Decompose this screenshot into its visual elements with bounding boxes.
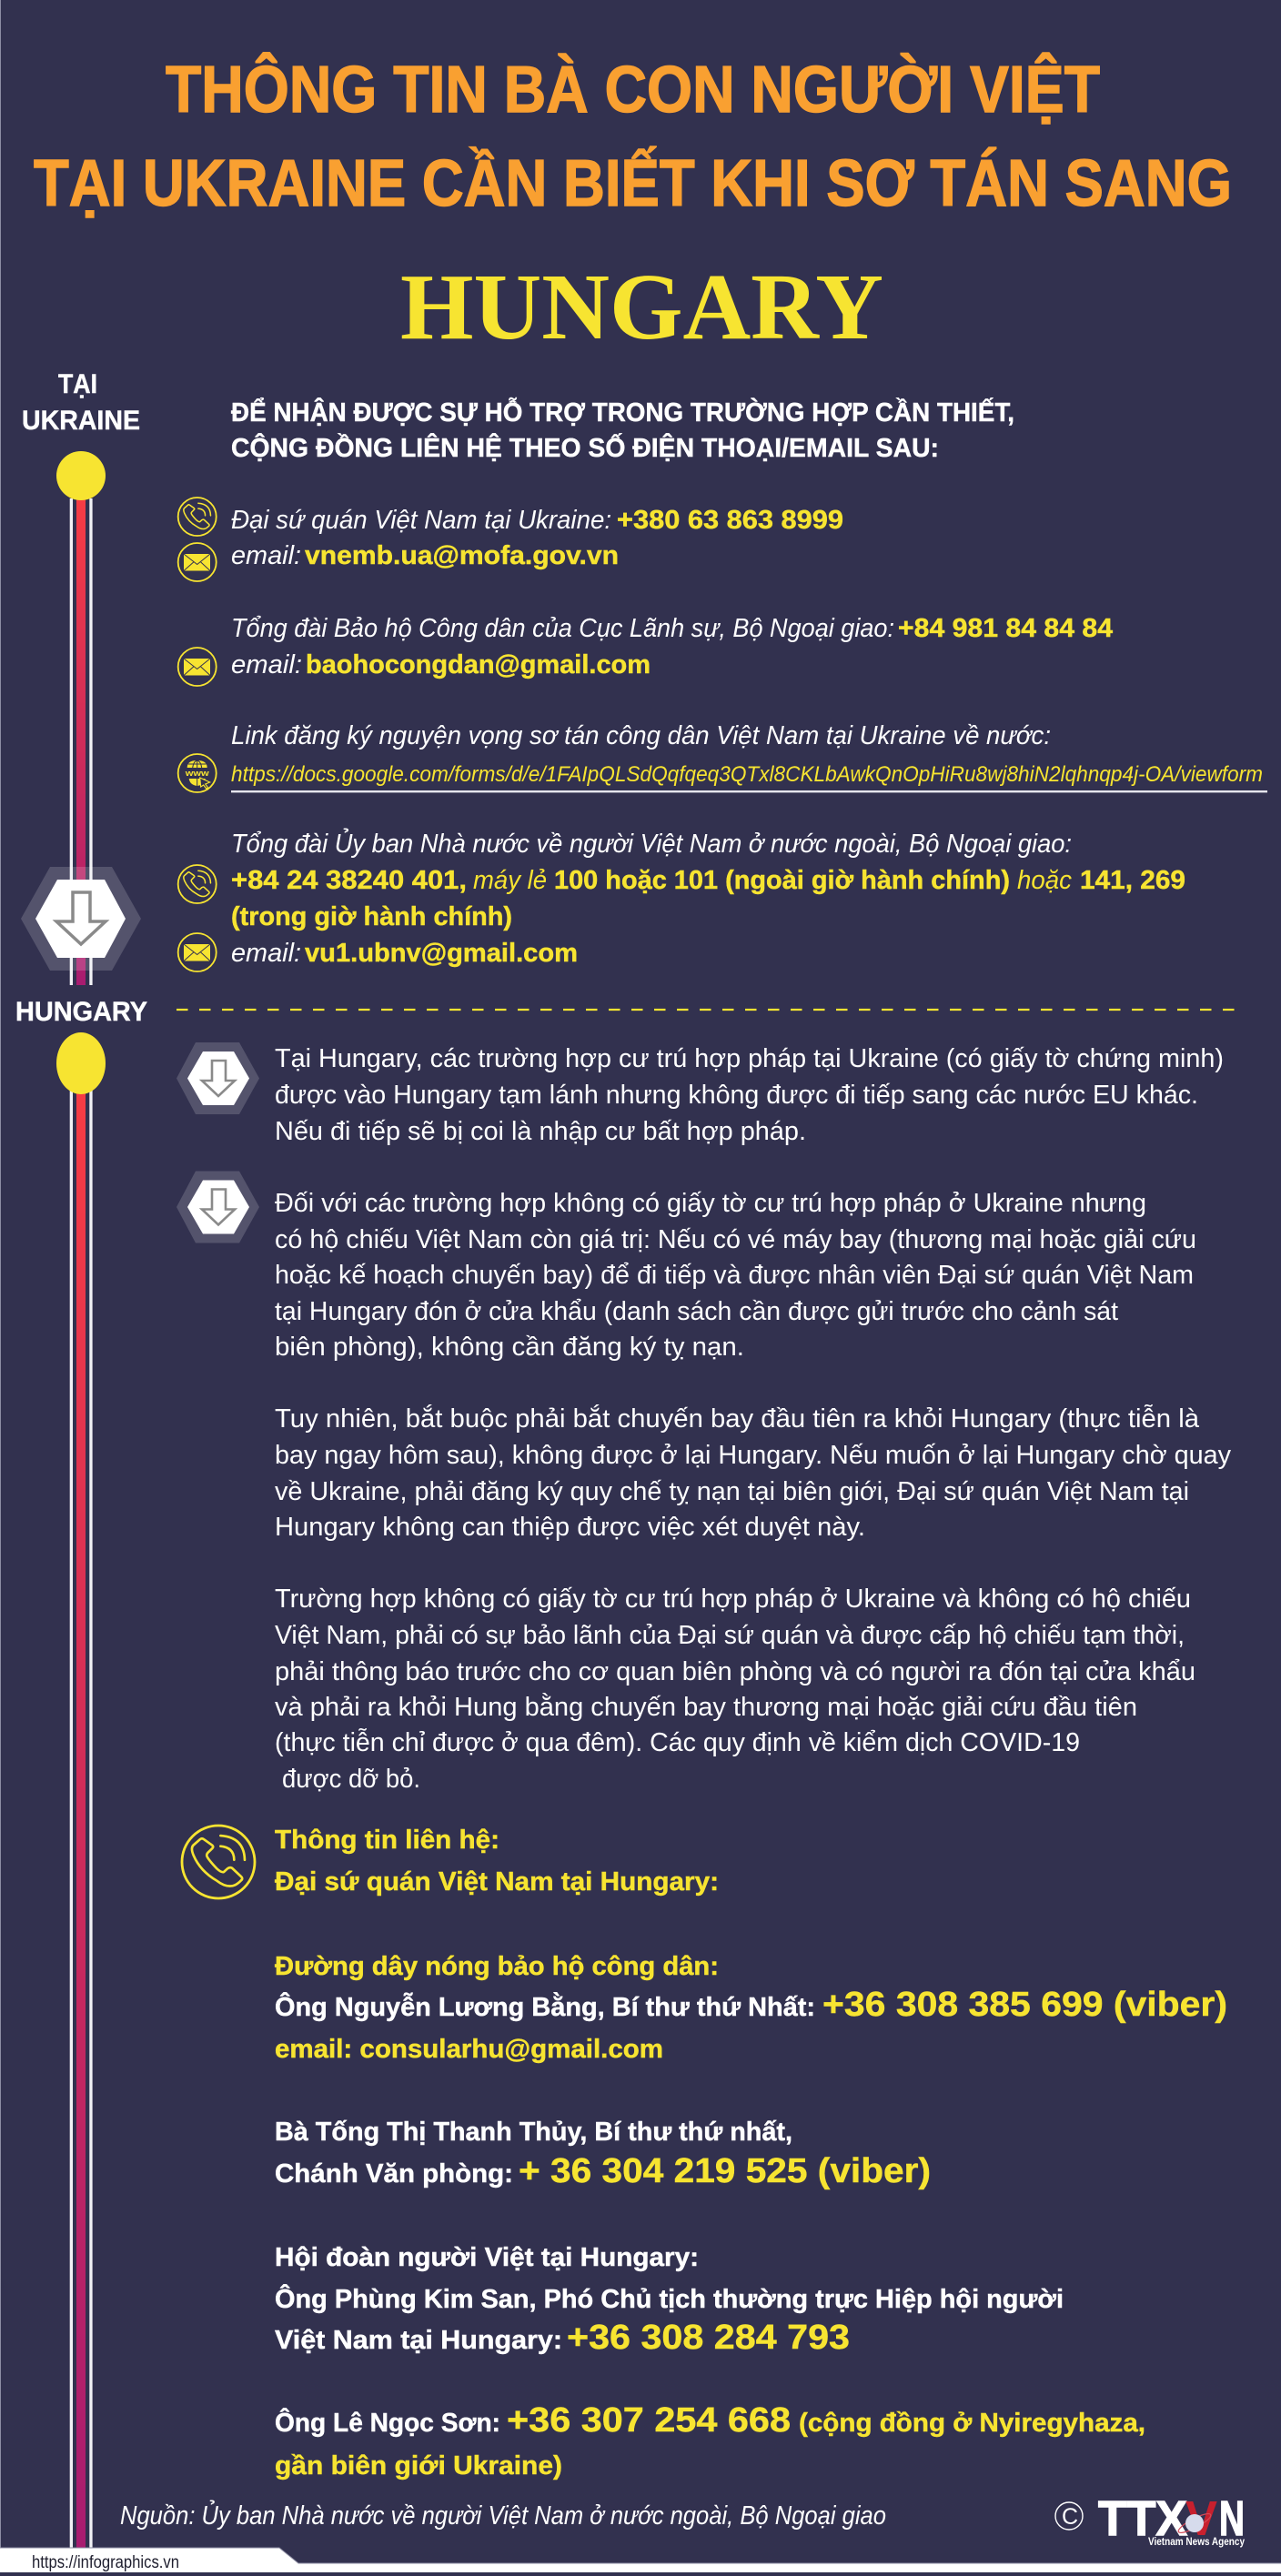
committee phone: 141, 269 (1080, 866, 1185, 895)
contact heading: Hungary embassy: Đại sứ quán Việt Nam tại Hungary: (275, 1867, 719, 1897)
text block: legal residents: Tại Hungary, các trường hợp cư trú hợp pháp tại Ukraine (có giấy tờ chứng minh) (275, 1044, 1224, 1073)
icon: mail (178, 543, 217, 581)
text block: first flight out: Tuy nhiên, bắt buộc phải bắt chuyến bay đầu tiên ra khỏi Hungary (thực tiễn là (275, 1404, 1200, 1434)
footer url: https://infographics.vn (32, 2553, 179, 2572)
text block: no residence papers, valid passport: Đối với các trường hợp không có giấy tờ cư trú hợp pháp ở Ukraine nhưng (275, 1189, 1146, 1218)
embassy phone (231, 506, 843, 535)
embassy phone: Đại sứ quán Việt Nam tại Ukraine: (231, 506, 611, 535)
text block: no papers and no passport: được dỡ bỏ. (282, 1765, 420, 1794)
text block: first flight out: Hungary không can thiệp được việc xét duyệt này. (275, 1513, 865, 1542)
contact: Nyiregyhaza community: Ông Lê Ngọc Sơn: (275, 2407, 500, 2438)
contact: Nyiregyhaza community: (cộng đồng ở Nyiregyhaza, (799, 2409, 1145, 2438)
committee phone (231, 866, 1185, 931)
text block: first flight out: về Ukraine, phải đăng ký quy chế tỵ nạn tại biên giới, Đại sứ quán Việt Nam tại (275, 1477, 1189, 1506)
contact: citizen protection hotline: email: consularhu@gmail.com (275, 2035, 663, 2064)
icon: large phone (182, 1826, 255, 1898)
text block: first flight out: bay ngay hôm sau), không được ở lại Hungary. Nếu muốn ở lại Hungary chờ quay (275, 1441, 1231, 1470)
committee email: vu1.ubnv@gmail.com (305, 939, 578, 968)
title (34, 53, 1232, 220)
consular email: baohocongdan@gmail.com (306, 650, 651, 679)
text block: legal residents: Nếu đi tiếp sẽ bị coi là nhập cư bất hợp pháp. (275, 1117, 806, 1146)
committee email: email: (231, 939, 301, 968)
contact heading: Hungary embassy: Thông tin liên hệ: (275, 1826, 499, 1855)
icon: hexagon down arrow (21, 867, 141, 971)
icon: phone (178, 865, 217, 903)
text block: no residence papers, valid passport (275, 1189, 1196, 1362)
contact: registration link (178, 721, 1267, 792)
logo: TTXVN: N (1219, 2491, 1245, 2546)
logo: TTXVN: C (1062, 2504, 1078, 2530)
text block: no residence papers, valid passport: tại Hungary đón ở cửa khẩu (danh sách cần được gửi trước cho cảnh sát (275, 1297, 1118, 1326)
text block: no papers and no passport: Trường hợp không có giấy tờ cư trú hợp pháp ở Ukraine và không có hộ chiếu (275, 1585, 1191, 1614)
committee name: Tổng đài Ủy ban Nhà nước về người Việt Nam ở nước ngoài, Bộ Ngoại giao: (231, 827, 1072, 859)
consular email: email: (231, 650, 302, 679)
contact: overseas Vietnamese committee (178, 827, 1185, 971)
contact: Vietnamese association: Hội đoàn người Việt tại Hungary: (275, 2243, 699, 2272)
contact heading: Hungary embassy (275, 1826, 719, 1897)
footer band (0, 2548, 1281, 2572)
contact: Vietnamese association: +36 308 284 793 (567, 2319, 850, 2357)
text block: no papers and no passport: (thực tiễn chỉ được ở qua đêm). Các quy định về kiểm dịch COVID-19 (275, 1727, 1080, 1757)
logo: TTXVN: Vietnam News Agency (1148, 2535, 1245, 2548)
embassy phone: +380 63 863 8999 (617, 506, 843, 535)
text block: no papers and no passport: Việt Nam, phải có sự bảo lãnh của Đại sứ quán và được cấp hộ chiếu tạm thời, (275, 1621, 1185, 1650)
icon: hexagon down arrow (177, 1042, 259, 1114)
label: Hungary: HUNGARY (15, 997, 147, 1027)
text block: no papers and no passport: phải thông báo trước cho cơ quan biên phòng và có người ra đón tại cửa khẩu (275, 1657, 1195, 1686)
label: Tại Ukraine: TẠI (58, 369, 97, 399)
consular phone: +84 981 84 84 84 (898, 614, 1113, 643)
source note: Nguồn: Ủy ban Nhà nước về người Việt Nam ở nước ngoài, Bộ Ngoại giao (120, 2499, 886, 2531)
contact heading: CỘNG ĐỒNG LIÊN HỆ THEO SỐ ĐIỆN THOẠI/EMAIL SAU: (231, 432, 939, 463)
contact: citizen protection hotline (275, 1952, 1227, 2064)
icon: www (178, 754, 217, 792)
contact: Nyiregyhaza community (275, 2401, 1145, 2480)
committee phone: +84 24 38240 401, (231, 866, 467, 895)
contact heading (231, 397, 1014, 463)
embassy email: vnemb.ua@mofa.gov.vn (305, 541, 619, 570)
label: Tại Ukraine (22, 369, 140, 436)
contact: citizen protection hotline: Đường dây nóng bảo hộ công dân: (275, 1952, 719, 1981)
committee phone: máy lẻ (473, 866, 547, 895)
text block: legal residents (275, 1044, 1224, 1146)
label: Tại Ukraine: UKRAINE (22, 406, 140, 436)
contact: Nyiregyhaza community: +36 307 254 668 (507, 2401, 791, 2440)
contact: chief of office (275, 2118, 931, 2190)
contact: Vietnamese association (275, 2243, 1064, 2357)
contact heading: ĐỂ NHẬN ĐƯỢC SỰ HỖ TRỢ TRONG TRƯỜNG HỢP CẦN THIẾT, (231, 397, 1014, 428)
title: THÔNG TIN BÀ CON NGƯỜI VIỆT (166, 53, 1100, 126)
icon: phone (178, 498, 217, 536)
icon: hexagon down arrow (177, 1172, 259, 1243)
text block: no residence papers, valid passport: biên phòng), không cần đăng ký tỵ nạn. (275, 1333, 744, 1362)
consular phone: Tổng đài Bảo hộ Công dân của Cục Lãnh sự, Bộ Ngoại giao: (231, 614, 894, 643)
text block: no papers and no passport: và phải ra khỏi Hung bằng chuyến bay thương mại hoặc giải cứu đầu tiên (275, 1692, 1137, 1722)
icon: mail (178, 933, 217, 971)
heading: Hungary: HUNGARY (400, 255, 883, 359)
contact: Vietnamese association: Việt Nam tại Hungary: (275, 2326, 562, 2355)
embassy email: email: (231, 541, 301, 570)
icon: www: www (185, 769, 209, 779)
text block: legal residents: được vào Hungary tạm lánh nhưng không được đi tiếp sang các nước EU khác. (275, 1081, 1198, 1110)
text block: no residence papers, valid passport: có hộ chiếu Việt Nam còn giá trị: Nếu có vé máy bay (thương mại hoặc giải cứu (275, 1225, 1196, 1254)
logo: TTXVN (1055, 2491, 1245, 2548)
contact: chief of office: + 36 304 219 525 (viber) (519, 2152, 931, 2190)
contact: consular hotline (178, 614, 1113, 686)
logo: TTXVN: V (1185, 2491, 1217, 2546)
text block: no papers and no passport (275, 1585, 1195, 1794)
committee phone: 100 hoặc 101 (ngoài giờ hành chính) (554, 866, 1010, 895)
contact: Nyiregyhaza community: gần biên giới Ukraine) (275, 2451, 562, 2480)
timeline: Hungary (56, 1032, 106, 2548)
timeline: Ukraine to Hungary (56, 451, 106, 985)
contact: citizen protection hotline: Ông Nguyễn Lương Bằng, Bí thư thứ Nhất: (275, 1991, 815, 2022)
icon: mail (178, 648, 217, 686)
contact: citizen protection hotline: +36 308 385 699 (viber) (822, 1986, 1227, 2024)
contact: Ukraine embassy (178, 498, 843, 581)
committee phone: (trong giờ hành chính) (231, 902, 512, 931)
contact: Vietnamese association: Ông Phùng Kim San, Phó Chủ tịch thường trực Hiệp hội người (275, 2283, 1064, 2314)
contact: chief of office: Bà Tống Thị Thanh Thủy, Bí thư thứ nhất, (275, 2118, 792, 2147)
logo: TTXVN: TTX (1098, 2491, 1187, 2546)
text block: first flight out (275, 1404, 1231, 1542)
link label: Link đăng ký nguyện vọng sơ tán công dân Việt Nam tại Ukraine về nước: (231, 721, 1051, 750)
contact: chief of office: Chánh Văn phòng: (275, 2159, 513, 2189)
text block: no residence papers, valid passport: hoặc kế hoạch chuyến bay) để đi tiếp và được nhân viên Đại sứ quán Việt Nam (275, 1261, 1194, 1290)
committee phone: hoặc (1017, 866, 1072, 895)
